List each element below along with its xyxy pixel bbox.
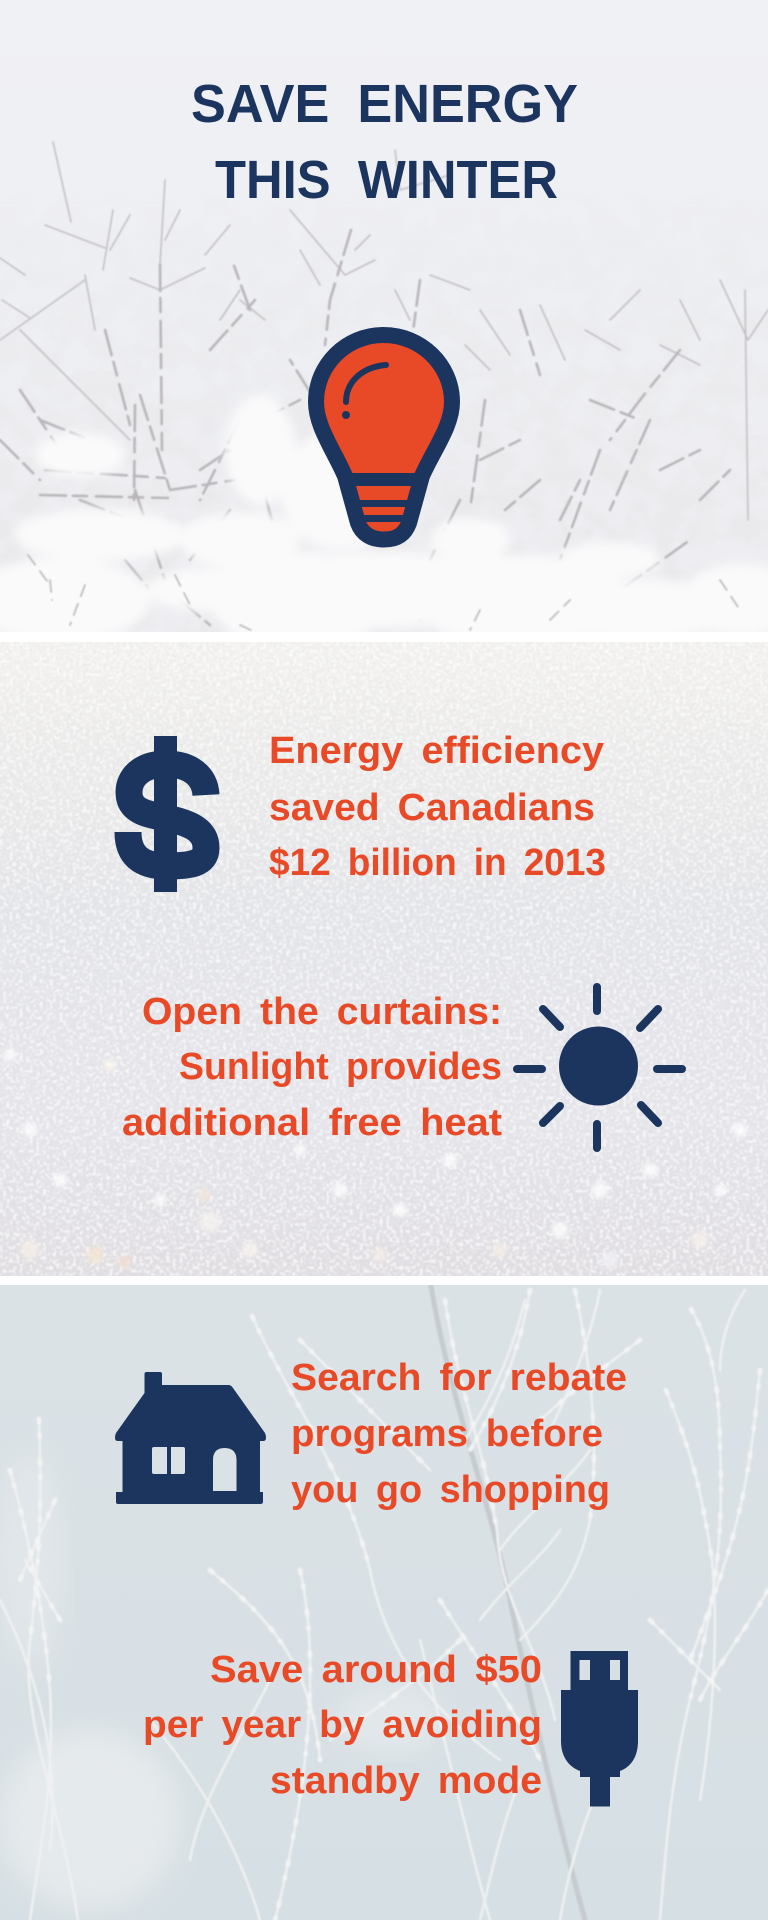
text: rebate programs: programs before <box>291 1413 603 1455</box>
title: THIS WINTER <box>215 150 558 210</box>
background: snow-covered shrubs <box>0 141 768 632</box>
background: pale winter sky <box>0 0 768 632</box>
icon: dollar sign <box>128 736 206 892</box>
text: rebate programs: you go shopping <box>291 1469 610 1511</box>
text: standby mode saving: per year by avoiding <box>143 1704 542 1746</box>
text: open the curtains: Sunlight provides <box>179 1046 502 1088</box>
icon: power plug <box>561 1651 638 1806</box>
text: open the curtains: additional free heat <box>122 1102 502 1144</box>
text: energy efficiency saving <box>269 730 606 884</box>
background: frosted branches on grey-blue sky <box>0 1285 768 1920</box>
text: energy efficiency saving: $12 billion in 2013 <box>269 842 606 884</box>
title: SAVE ENERGY <box>191 74 578 134</box>
panel: sparkling snow with savings and sunlight <box>0 642 768 1276</box>
background: glittering snow <box>0 642 768 1276</box>
text: open the curtains: Open the curtains: <box>142 991 502 1033</box>
text: rebate programs <box>291 1357 627 1511</box>
text: energy efficiency saving: Energy efficiency <box>269 730 604 772</box>
panel: winter snow branches header <box>0 0 768 648</box>
text: standby mode saving: standby mode <box>270 1760 542 1802</box>
text: standby mode saving: Save around $50 <box>210 1649 542 1691</box>
panel: frosted branches with rebates and standby <box>0 1285 768 1920</box>
icon: light bulb <box>316 335 452 540</box>
title <box>192 84 578 198</box>
text: standby mode saving <box>143 1649 542 1802</box>
icon: house <box>115 1372 266 1504</box>
text: open the curtains <box>122 991 502 1144</box>
text: rebate programs: Search for rebate <box>291 1357 627 1399</box>
icon: sun <box>517 987 682 1148</box>
text: energy efficiency saving: saved Canadians <box>269 787 595 829</box>
